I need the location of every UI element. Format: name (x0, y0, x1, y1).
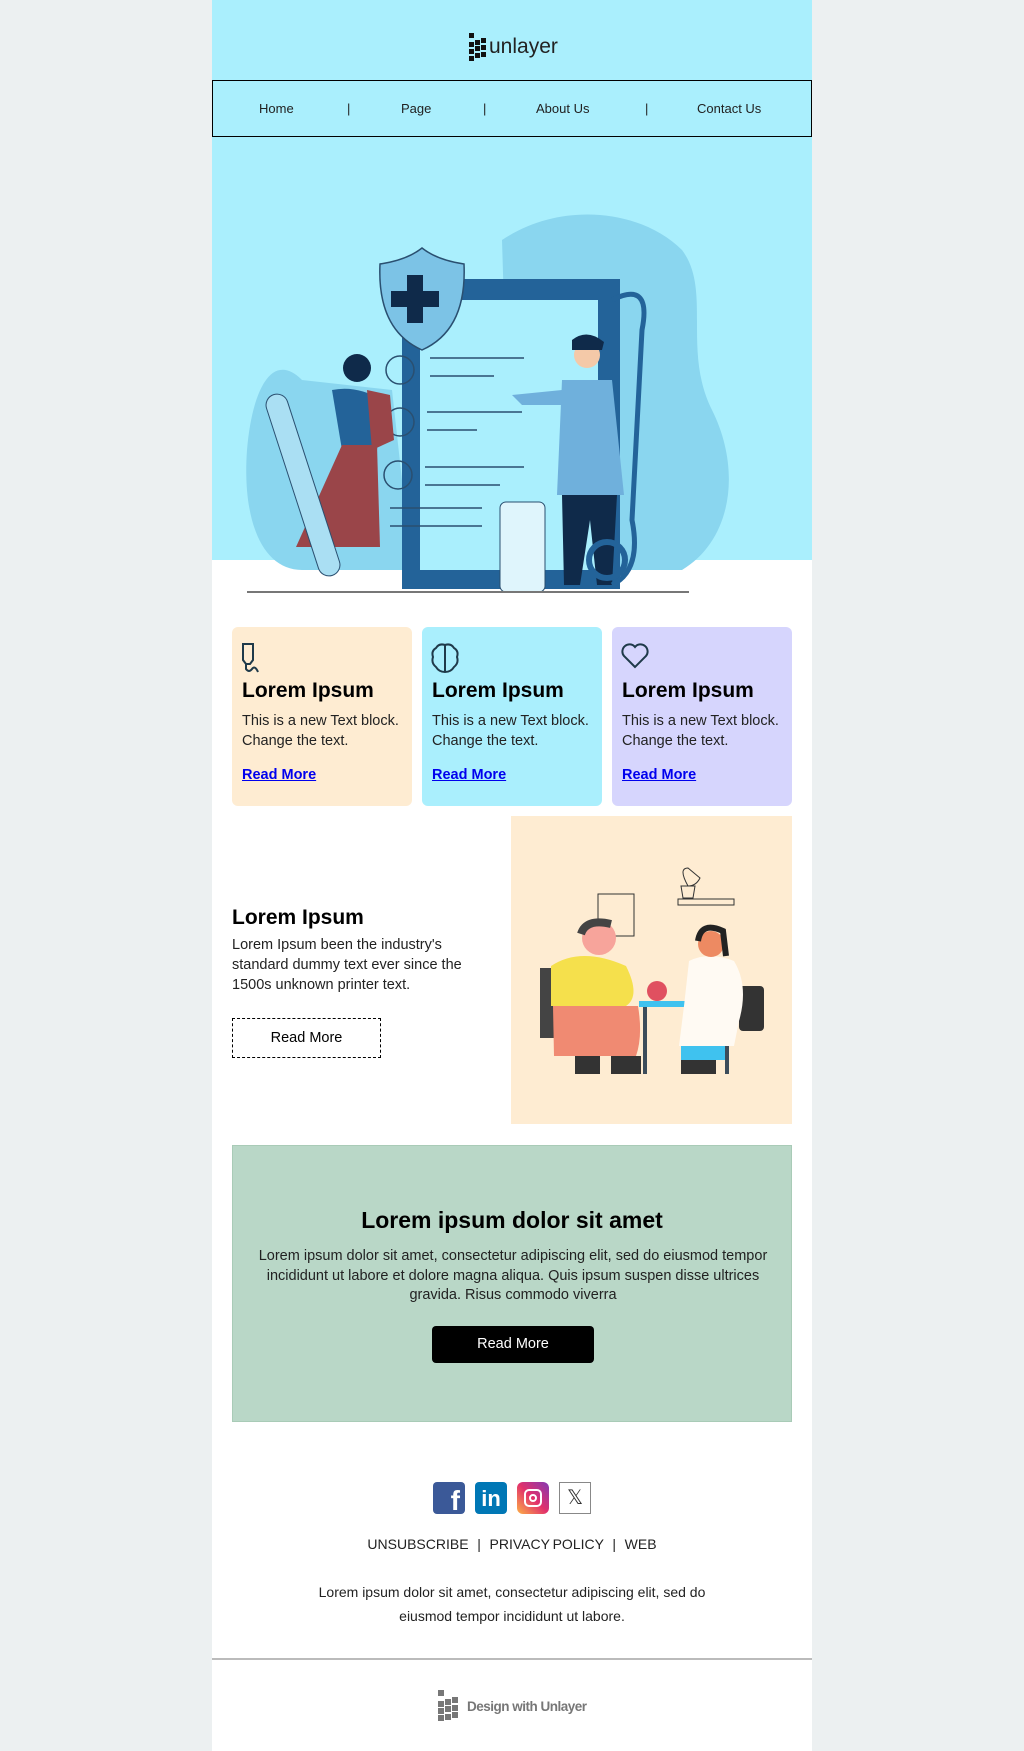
doctor (574, 342, 600, 368)
heading: Lorem ipsum dolor sit amet (361, 1207, 663, 1233)
navigation bar: Home (259, 101, 294, 116)
card 1 (232, 627, 412, 806)
icon: heart (621, 643, 649, 668)
icon: facebook (433, 1482, 465, 1514)
card 3: Read More (622, 767, 696, 783)
button: read more outline (232, 1018, 381, 1058)
text block: section 2: Lorem Ipsum been the industry's standard dummy text ever since the 1500s unknown printer text. (232, 937, 462, 993)
logo (469, 33, 558, 61)
footer text: Lorem ipsum dolor sit amet, consectetur adipiscing elit, sed do eiusmod tempor incididunt ut labore. (319, 1584, 705, 1624)
navigation bar: Contact Us (697, 101, 761, 116)
navigation bar: Page (401, 101, 431, 116)
footer links: UNSUBSCRIBE | PRIVACY POLICY | WEB (367, 1536, 657, 1552)
thermometer (263, 391, 343, 579)
card 2 (422, 627, 602, 806)
card 2: Read More (432, 767, 506, 783)
card 1: This is a new Text block. Change the text. (242, 713, 399, 748)
panel: green callout (232, 1145, 792, 1422)
card 2: This is a new Text block. Change the text. (432, 713, 589, 748)
icon: x (559, 1482, 591, 1514)
icon: x: 𝕏 (567, 1487, 583, 1509)
stethoscope (612, 294, 644, 585)
text block: section 2 (232, 906, 462, 1058)
icon: linkedin: in (481, 1486, 501, 1511)
social icons (433, 1482, 591, 1516)
navigation bar: | (645, 101, 648, 116)
button: read more (432, 1326, 594, 1363)
icon: instagram (517, 1482, 549, 1514)
card 3: This is a new Text block. Change the text. (622, 713, 779, 748)
consultation illustration (511, 816, 792, 1124)
button: read more: Read More (477, 1336, 549, 1352)
card 1: Lorem Ipsum (242, 679, 374, 702)
icon: brain (431, 643, 459, 673)
paragraph: Lorem ipsum dolor sit amet, consectetur adipiscing elit, sed do eiusmod tempor incididunt ut labore et dolore magna aliqua. Quis ipsum suspen disse ultrices gravida. Risus commodo viverra (259, 1248, 767, 1303)
logo: unlayer (489, 35, 558, 58)
clipboard (402, 279, 620, 589)
navigation bar: | (347, 101, 350, 116)
navigation bar: About Us (536, 101, 589, 116)
text block: section 2: Lorem Ipsum (232, 906, 364, 929)
bottle (500, 502, 545, 592)
mother (343, 354, 371, 382)
card 3 (612, 627, 792, 806)
button: read more outline: Read More (271, 1030, 342, 1046)
header background (212, 0, 812, 560)
footer logo: Design with Unlayer (467, 1699, 587, 1714)
icon: linkedin (475, 1482, 507, 1514)
shield (380, 248, 464, 350)
navigation bar (212, 80, 812, 137)
icon: facebook: f (451, 1485, 460, 1516)
footer logo (438, 1690, 587, 1721)
card 3: Lorem Ipsum (622, 679, 754, 702)
hero illustration (246, 214, 729, 593)
navigation bar: | (483, 101, 486, 116)
card 2: Lorem Ipsum (432, 679, 564, 702)
card 1: Read More (242, 767, 316, 783)
icon: IV bag (242, 643, 259, 672)
